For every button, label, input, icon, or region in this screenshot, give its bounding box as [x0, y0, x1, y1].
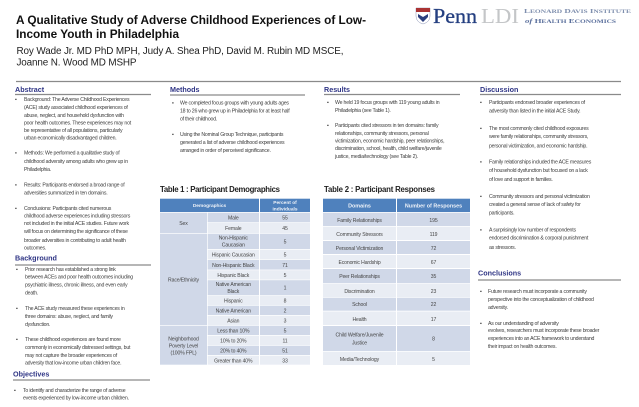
- table 1: participant demographics: Non-Hispanic: [219, 236, 248, 242]
- text: Conclusions: their impact on health outcomes.: [488, 344, 557, 350]
- table 2: participant responses: 72: [431, 246, 436, 252]
- text: Background: death.: [25, 291, 38, 297]
- table 1: participant demographics: Male: [228, 216, 239, 222]
- table 1: participant demographics: Asian: [227, 318, 240, 324]
- text: Abstract: childhood adverse experiences including stressors: [24, 214, 131, 220]
- table 2: participant responses: Health: [352, 317, 367, 323]
- heading: Methods: [170, 85, 305, 95]
- text: Abstract: Background: The Adverse Childhood Experiences: [24, 97, 130, 103]
- table 1: participant demographics: 8: [284, 298, 287, 304]
- table 1: participant demographics: Black: [227, 289, 240, 295]
- heading: Table 1: Table 1 : Participant Demographics: [160, 185, 281, 194]
- text: Results: ▪: [327, 100, 329, 106]
- text: Methods: 18 to 26 who grew up in Philadelphia for at least half: [180, 109, 290, 115]
- text: Abstract: (ACE) study associated childhood experiences of: [24, 105, 128, 111]
- table 1: participant demographics: 3: [284, 318, 287, 324]
- text: Background: adversity that low-income urban children face.: [25, 361, 121, 367]
- heading: Conclusions: Conclusions: [478, 269, 521, 278]
- table 2: participant responses: Domains: [348, 204, 371, 210]
- table 1: participant demographics: 10% to 20%: [220, 338, 247, 344]
- table 1: participant demographics: Native American: [216, 282, 251, 288]
- text: Methods: of their childhood.: [180, 117, 217, 123]
- text: Methods: ▪: [172, 101, 174, 107]
- table 1: participant demographics: Less than 10%: [217, 328, 250, 334]
- table 2: participant responses: Justice: [352, 340, 367, 346]
- text: Methods: generated a list of adverse childhood experiences: [180, 140, 285, 146]
- text: Background: The ACE study measured these experiences in: [25, 306, 125, 312]
- table 2: participant responses: School: [352, 302, 367, 308]
- text: Results: Participants cited stressors in ten domains: family: [335, 123, 439, 129]
- table 1: participant demographics: Individuals: [272, 206, 298, 212]
- table 1: participant demographics: 1: [284, 286, 287, 292]
- title: Income Youth in Philadelphia: [16, 27, 179, 41]
- text: Objectives: events experienced by low-income urban children.: [23, 395, 129, 401]
- table 1: participant demographics: Greater than 40%: [214, 358, 253, 364]
- table 1: participant demographics: 55: [282, 216, 288, 222]
- text: Abstract: ▪: [15, 151, 17, 157]
- table 1: participant demographics: Hispanic: [224, 298, 243, 304]
- text: Background: ▪: [16, 337, 18, 343]
- logo: Penn LDI: Penn: [433, 4, 478, 28]
- text: Discussion: [480, 100, 592, 251]
- text: Abstract: not included in the initial ACE studies. Future work: [24, 221, 130, 227]
- text: Conclusions: Future research must incorporate a community: [488, 289, 587, 295]
- text: Background: ▪: [16, 267, 18, 273]
- heading: Abstract: [15, 85, 151, 94]
- text: Conclusions: evolves, researchers must incorporate these broader: [488, 328, 600, 334]
- text: Abstract: [15, 97, 132, 252]
- table 1: participant demographics: Hispanic Black: [217, 273, 250, 279]
- table 1: participant demographics: 45: [282, 226, 288, 232]
- heading: Table 2: Table 2 : Participant Responses: [324, 185, 436, 194]
- text: Background: dysfunction.: [25, 322, 50, 328]
- text: Conclusions: As our understanding of adversity: [488, 321, 559, 327]
- text: Discussion: created a general sense of lack of safety for: [489, 202, 581, 208]
- logo: Penn LDI: LDI: [481, 4, 519, 28]
- text: Results: Philadelphia (see Table 1).: [335, 108, 391, 114]
- text: Results: [327, 100, 444, 160]
- text: Background: These childhood experiences are found more: [25, 337, 121, 343]
- text: Abstract: poor health outcomes. These experiences may not: [24, 121, 132, 127]
- text: Conclusions: [480, 289, 600, 350]
- text: Discussion: participants.: [489, 211, 514, 217]
- table 1: participant demographics: Sex: [179, 221, 188, 227]
- table 2: participant responses: 67: [431, 260, 436, 266]
- table 1: participant demographics: Hispanic Caucasian: [212, 252, 255, 258]
- text: Abstract: Results: Participants endorsed a broad range of: [24, 183, 125, 189]
- text: Abstract: ▪: [15, 183, 17, 189]
- table 1: participant demographics: (100% FPL): [171, 350, 197, 356]
- text: Discussion: of love and support in families.: [489, 177, 553, 183]
- authors: Joanne N. Wood MD MSHP: [16, 58, 137, 68]
- heading: Methods: Methods: [170, 85, 200, 94]
- text: Discussion: adversity than listed in the initial ACE Study.: [489, 109, 580, 115]
- text: Methods: ▪: [172, 132, 174, 138]
- table 1: participant demographics: 11: [282, 338, 288, 344]
- text: Conclusions: ▪: [480, 321, 482, 327]
- text: Abstract: adversities summarized in ten domains.: [24, 191, 108, 197]
- heading: Results: [324, 85, 460, 94]
- text: Discussion: as stressors.: [489, 245, 516, 251]
- text: Objectives: ▪: [14, 388, 16, 394]
- table 1: participant demographics: Female: [225, 226, 242, 232]
- text: Background: psychiatric illness, chronic illness, and even early: [25, 283, 128, 289]
- table 1: participant demographics: Demographics: [193, 203, 226, 209]
- table 2: participant responses: 23: [431, 289, 436, 295]
- table 2: participant responses: Discrimination: [344, 289, 375, 295]
- text: Discussion: of household dysfunction but focused on a lack: [489, 168, 588, 174]
- text: Objectives: [14, 388, 129, 401]
- text: Discussion: Participants endorsed broader experiences of: [489, 100, 586, 106]
- heading: Results: Results: [324, 85, 350, 94]
- text: Conclusions: adversity.: [488, 305, 508, 311]
- table 2: participant responses: Economic Hardship: [338, 260, 381, 266]
- logo: Penn LDI: [416, 4, 632, 28]
- text: Discussion: ▪: [480, 126, 482, 132]
- table 2: participant responses: Family Relationships: [337, 218, 382, 224]
- text: Background: Prior research has established a strong link: [25, 267, 116, 273]
- table 2: participant responses: Number of Responses: [405, 204, 462, 210]
- table 2: participant responses: 8: [432, 336, 435, 342]
- text: Discussion: A surprisingly low number of respondents: [489, 228, 576, 234]
- table 1: participant demographics: 5: [284, 240, 287, 246]
- table 1: participant demographics: 33: [282, 358, 288, 364]
- table 2: participant responses: Media/Technology: [340, 357, 380, 363]
- table 2: participant responses: 119: [430, 232, 438, 238]
- table 1: participant demographics: Poverty Level: [169, 344, 198, 350]
- text: Results: We held 19 focus groups with 119 young adults in: [335, 100, 440, 106]
- text: Background: commonly in economically distressed settings, but: [25, 345, 131, 351]
- table 2: participant responses: [323, 199, 470, 365]
- logo: Penn LDI: L EONARD D AVIS I NSTITUTE: [524, 9, 632, 15]
- table 1: participant demographics: Caucasian: [222, 242, 245, 248]
- text: Results: justice, media/technology (see Table 2).: [334, 154, 418, 160]
- heading: Background: Background: [15, 254, 57, 263]
- text: Results: relationships, community stressors, personal: [335, 131, 429, 137]
- table 2: participant responses: 5: [432, 357, 435, 363]
- text: Background: may not capture the broader experiences of: [25, 353, 118, 359]
- heading: Background: [15, 254, 151, 265]
- text: Discussion: ▪: [480, 100, 482, 106]
- table 2: participant responses: Personal Victimization: [336, 246, 383, 252]
- text: Results: discrimination, school, health, child welfare/juvenile: [335, 146, 442, 152]
- table 1: participant demographics: Non-Hispanic Black: [212, 263, 255, 269]
- text: Methods: [172, 101, 290, 154]
- text: Discussion: Family relationships included the ACE measures: [489, 160, 592, 166]
- table 1: participant demographics: Neighborhood: [168, 336, 199, 342]
- text: Conclusions: perspective into the conceptualization of childhood: [488, 297, 594, 303]
- logo: Penn LDI: of H EALTH E CONOMICS: [525, 19, 616, 25]
- table 1: participant demographics: 71: [282, 263, 288, 269]
- heading: Discussion: Discussion: [480, 85, 518, 94]
- title: A Qualitative Study of Adverse Childhood Experiences of Low-: [16, 13, 366, 27]
- text: Results: victimization, economic hardship, peer relationships,: [335, 139, 444, 145]
- text: Conclusions: ▪: [480, 289, 482, 295]
- table 2: participant responses: 195: [429, 218, 438, 224]
- text: Abstract: urban economically disadvantaged children.: [24, 136, 117, 142]
- text: Abstract: ▪: [15, 206, 17, 212]
- table 1: participant demographics: [160, 199, 310, 365]
- table 2: participant responses: Child Welfare/Juvenile: [336, 332, 384, 338]
- table 2: participant responses: Community Stressors: [336, 232, 383, 238]
- heading: Abstract: Abstract: [15, 85, 45, 94]
- text: Discussion: The most commonly cited childhood exposures: [489, 126, 589, 132]
- text: Discussion: personal victimization, and economic hardship.: [489, 144, 587, 150]
- table 2: participant responses: 22: [431, 302, 436, 308]
- authors: [16, 46, 344, 68]
- table 2: participant responses: 17: [431, 317, 436, 323]
- table 2: participant responses: Peer Relationships: [339, 274, 380, 280]
- table 1: participant demographics: 5: [284, 252, 287, 258]
- table 1: participant demographics: Native American: [216, 308, 251, 314]
- text: Abstract: Philadelphia.: [24, 167, 51, 173]
- text: Abstract: be representative of all populations, particularly: [24, 128, 123, 134]
- text: Background: three domains: abuse, neglect, and family: [25, 314, 113, 320]
- text: Methods: Using the Nominal Group Technique, participants: [180, 132, 284, 138]
- text: Discussion: ▪: [480, 160, 482, 166]
- text: Abstract: broader adversities in contributing to adult health: [24, 238, 126, 244]
- text: Abstract: ▪: [15, 97, 17, 103]
- text: Abstract: Conclusions: Participants cited numerous: [24, 206, 112, 212]
- table 1: participant demographics: Percent of: [273, 200, 297, 206]
- text: Discussion: ▪: [480, 228, 482, 234]
- heading: Objectives: Objectives: [13, 370, 49, 379]
- heading: Objectives: [13, 370, 150, 380]
- text: Background: ▪: [16, 306, 18, 312]
- table 1: participant demographics: 20% to 40%: [220, 348, 247, 354]
- icon: Penn shield: [416, 8, 430, 24]
- table 2: participant responses: 35: [431, 274, 436, 280]
- text: Abstract: Methods: We performed a qualitative study of: [24, 151, 120, 157]
- text: Abstract: abuse, neglect, and household dysfunction with: [24, 113, 124, 119]
- text: Discussion: endorsed discrimination & corporal punishment: [489, 236, 589, 242]
- table 1: participant demographics: Race/Ethnicity: [168, 278, 200, 284]
- table 1: participant demographics: 51: [282, 348, 288, 354]
- text: Methods: We completed focus groups with young adults ages: [180, 101, 289, 107]
- text: Background: [16, 267, 133, 367]
- text: Methods: arranged in order of perceived significance.: [180, 148, 271, 154]
- table 1: participant demographics: 5: [284, 273, 287, 279]
- text: Abstract: outcomes.: [24, 246, 46, 252]
- text: Abstract: will focus on determining the significance of these: [24, 229, 128, 235]
- text: Conclusions: experiences into an ACE framework to understand: [488, 336, 595, 342]
- text: Discussion: ▪: [480, 194, 482, 200]
- text: Objectives: To identify and characterize the range of adverse: [23, 388, 126, 394]
- text: Abstract: childhood adversity among adults who grew up in: [24, 159, 128, 165]
- table 1: participant demographics: 5: [284, 328, 287, 334]
- authors: Roy Wade Jr. MD PhD MPH, Judy A. Shea PhD, David M. Rubin MD MSCE,: [16, 46, 344, 57]
- table 1: participant demographics: 2: [284, 308, 287, 314]
- text: Background: between ACEs and poor health outcomes including: [25, 275, 133, 281]
- text: Discussion: Community stressors and personal victimization: [489, 194, 590, 200]
- title: [16, 13, 366, 41]
- text: Discussion: were family relationships, community stressors,: [489, 134, 588, 140]
- text: Results: ▪: [327, 123, 329, 129]
